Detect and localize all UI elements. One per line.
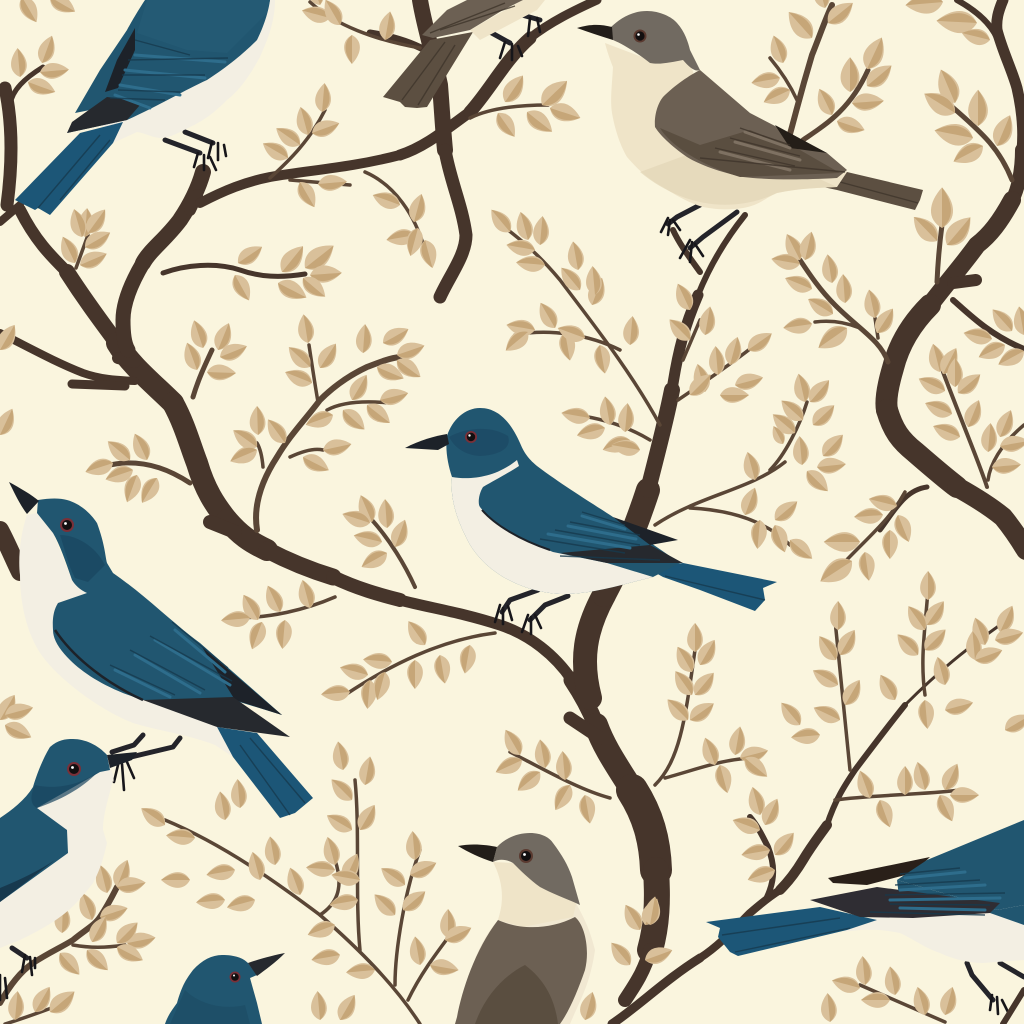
bird: large left blue	[9, 482, 313, 818]
bird: top right brown	[577, 11, 923, 262]
leaf clusters: around lower trunk	[492, 623, 772, 825]
leaf clusters: far top right	[905, 0, 1018, 282]
leaf clusters: upper middle twigs	[259, 82, 440, 270]
bird: bottom small blue head	[165, 953, 285, 1024]
leaf clusters: lower right tree	[730, 571, 1024, 887]
leaf clusters: sprig off upper left branch	[56, 205, 342, 305]
bird: bottom right blue	[706, 820, 1024, 1024]
leaf clusters: bottom edge	[310, 955, 960, 1024]
leaf clusters: right of upper branch	[470, 71, 583, 141]
leaf clusters: right mid sprigs	[770, 230, 1024, 372]
leaf clusters: centre-left sprigs	[83, 313, 427, 530]
leaf clusters: far right	[815, 342, 1024, 590]
bird: top centre brown	[383, 0, 545, 108]
leaf clusters: left edge	[0, 321, 1024, 744]
bird: bottom left blue	[0, 739, 137, 1000]
leaf clusters: tree left of trunk	[485, 205, 660, 458]
bird: top left blue	[15, 0, 275, 215]
leaf clusters: top right sprig	[750, 0, 897, 140]
bird: centre blue	[405, 408, 777, 634]
leaf clusters: bottom centre sprig	[137, 740, 475, 1024]
leaf clusters: tree right of trunk	[655, 280, 849, 565]
leaf clusters: top left	[10, 0, 79, 99]
leaf clusters: under main branch	[220, 492, 495, 710]
leaf clusters: bottom left sprig	[0, 857, 157, 1024]
leaf clusters: beside lower trunk	[605, 895, 675, 970]
leaf clusters: top centre	[300, 0, 420, 64]
bird: bottom centre brown	[455, 833, 595, 1024]
